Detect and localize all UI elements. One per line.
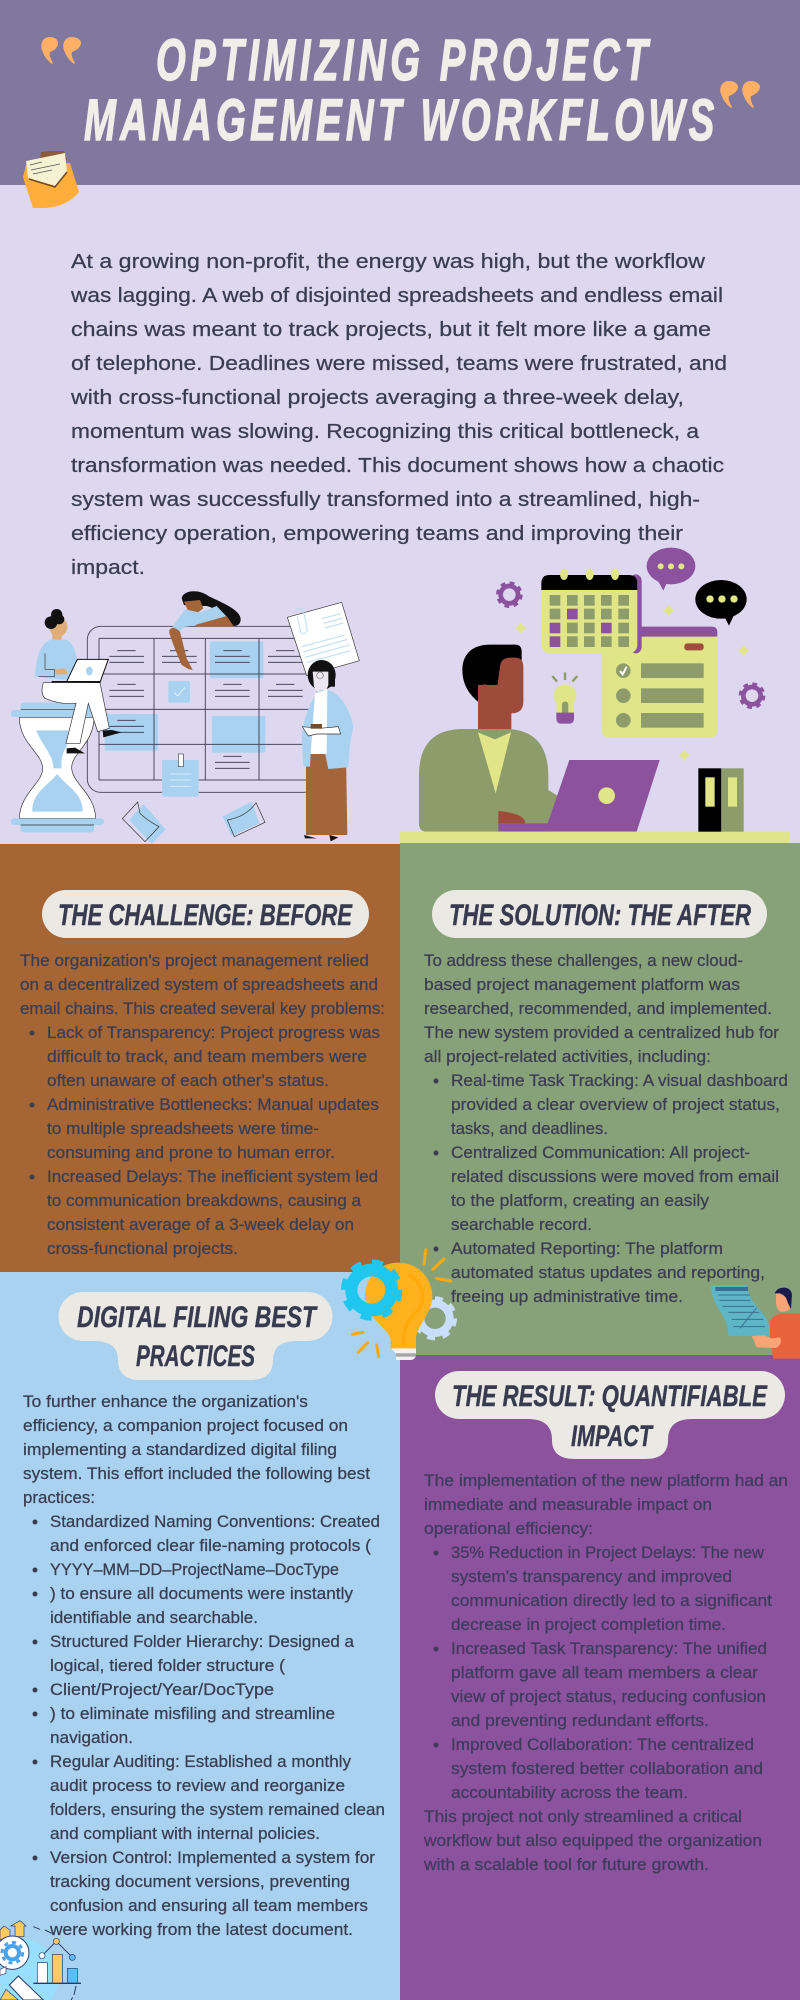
text: result intro, bullets and closing: view of project status, reducing confusion [451, 1687, 766, 1706]
heading: the solution [432, 890, 767, 938]
binders [698, 768, 744, 832]
text: result intro, bullets and closing: immediate and measurable impact on [424, 1495, 712, 1514]
text: challenge intro and bullets: cross-functional projects. [47, 1239, 238, 1258]
text: result intro, bullets and closing: The implementation of the new platform had an [424, 1471, 788, 1490]
text: solution intro and bullets: To address these challenges, a new cloud- [424, 951, 743, 970]
text: challenge intro and bullets: consistent average of a 3-week delay on [47, 1215, 354, 1234]
text: result intro, bullets and closing: Increased Task Transparency: The unified [451, 1639, 767, 1658]
text: filing intro and bullets [23, 1392, 385, 1939]
text: challenge intro and bullets: on a decentralized system of spreadsheets and [20, 975, 378, 994]
header banner [0, 0, 800, 185]
heading: the result [435, 1371, 785, 1459]
text: result intro, bullets and closing: with a scalable tool for future growth. [423, 1855, 709, 1874]
hourglass [11, 703, 104, 832]
text: result intro, bullets and closing: workflow but also equipped the organization [423, 1831, 762, 1850]
text: solution intro and bullets: Automated Reporting: The platform [451, 1239, 723, 1258]
intro text block: chains was meant to track projects, but it felt more like a game [71, 319, 711, 341]
panel: digital filing best practices [0, 1272, 400, 2000]
icon: closing quotation marks [720, 81, 760, 108]
heading: digital filing: DIGITAL FILING BEST [77, 1301, 318, 1334]
title: OPTIMIZING PROJECT [156, 29, 651, 93]
text: solution intro and bullets: researched, recommended, and implemented. [424, 999, 772, 1018]
text: result intro, bullets and closing: operational efficiency: [424, 1519, 593, 1538]
heading: the challenge: THE CHALLENGE: BEFORE [58, 899, 353, 932]
text: filing intro and bullets: system. This effort included the following best [23, 1464, 370, 1483]
text: filing intro and bullets: Structured Folder Hierarchy: Designed a [50, 1632, 355, 1651]
text: filing intro and bullets: implementing a standardized digital filing [23, 1440, 337, 1459]
loose papers on the floor [122, 802, 265, 844]
person with laptop on hourglass [35, 609, 122, 753]
person leaning over the board [169, 591, 241, 670]
icon: light bulb with gears [346, 1250, 454, 1360]
icon: analytics tools [0, 1921, 81, 2000]
heading: digital filing [58, 1292, 332, 1380]
text: challenge intro and bullets: to communication breakdowns, causing a [47, 1191, 362, 1210]
text: filing intro and bullets: identifiable and searchable. [50, 1608, 258, 1627]
text: challenge intro and bullets: to multiple spreadsheets were time- [47, 1119, 319, 1138]
text: challenge intro and bullets: difficult to track, and team members were [47, 1047, 367, 1066]
text: filing intro and bullets: navigation. [50, 1728, 133, 1747]
text: solution intro and bullets: Real-time Task Tracking: A visual dashboard [451, 1071, 788, 1090]
text: result intro, bullets and closing: system fostered better collaboration and [451, 1759, 763, 1778]
text: challenge intro and bullets: Lack of Transparency: Project progress was [47, 1023, 380, 1042]
text: filing intro and bullets: Regular Auditing: Established a monthly [50, 1752, 351, 1771]
speech bubble: purple [647, 548, 695, 591]
text: solution intro and bullets: tasks, and deadlines. [451, 1119, 608, 1138]
text: solution intro and bullets [424, 951, 788, 1306]
text: challenge intro and bullets: Increased Delays: The inefficient system led [47, 1167, 378, 1186]
text: result intro, bullets and closing: communication directly led to a significant [451, 1591, 772, 1610]
text: filing intro and bullets: Version Control: Implemented a system for [50, 1848, 375, 1867]
text: solution intro and bullets: provided a clear overview of project status, [451, 1095, 780, 1114]
text: solution intro and bullets: searchable record. [451, 1215, 592, 1234]
heading: the result: IMPACT [571, 1420, 654, 1453]
text: challenge intro and bullets: consuming and prone to human error. [47, 1143, 335, 1162]
text: filing intro and bullets: efficiency, a companion project focused on [23, 1416, 348, 1435]
text: filing intro and bullets: audit process to review and reorganize [50, 1776, 345, 1795]
intro text block: with cross-functional projects averaging a three-week delay, [70, 387, 684, 409]
text: result intro, bullets and closing: Improved Collaboration: The centralized [451, 1735, 754, 1754]
text: filing intro and bullets: To further enhance the organization's [23, 1392, 308, 1411]
text: challenge intro and bullets: The organization's project management relied [20, 951, 369, 970]
heading: digital filing: PRACTICES [136, 1340, 255, 1373]
title: MANAGEMENT WORKFLOWS [84, 89, 714, 153]
intro text block: impact. [71, 557, 145, 579]
text: filing intro and bullets: ) to eliminate misfiling and streamline [50, 1704, 335, 1723]
icon: light bulb [552, 672, 577, 724]
icon: purple gears [498, 583, 763, 707]
speech bubble: black [695, 580, 747, 626]
text: solution intro and bullets: The new system provided a centralized hub for [424, 1023, 779, 1042]
panel: the solution [400, 843, 800, 1355]
text: solution intro and bullets: related discussions were moved from email [451, 1167, 779, 1186]
text: solution intro and bullets: to the platform, creating an easily [451, 1191, 710, 1210]
illustration: team around a task board [11, 591, 359, 844]
text: filing intro and bullets: folders, ensuring the system remained clean [50, 1800, 385, 1819]
text: filing intro and bullets: confusion and ensuring all team members [50, 1896, 368, 1915]
intro text block: system was successfully transformed into a streamlined, high- [71, 489, 700, 511]
text: filing intro and bullets: YYYY–MM–DD–ProjectName–DocType [50, 1560, 339, 1579]
text: filing intro and bullets: and enforced clear file-naming protocols ( [50, 1536, 371, 1555]
intro text block: momentum was slowing. Recognizing this critical bottleneck, a [71, 421, 700, 443]
text: result intro, bullets and closing: 35% Reduction in Project Delays: The new [451, 1543, 765, 1562]
title [84, 29, 714, 153]
text: solution intro and bullets: all project-related activities, including: [424, 1047, 711, 1066]
text: challenge intro and bullets: Administrative Bottlenecks: Manual updates [47, 1095, 379, 1114]
panel: the result [400, 1355, 800, 2000]
panel: the challenge [0, 844, 400, 1272]
standing person with glasses [302, 660, 353, 841]
text: result intro, bullets and closing: and preventing redundant efforts. [451, 1711, 709, 1730]
intro text block: transformation was needed. This document shows how a chaotic [71, 455, 724, 477]
text: result intro, bullets and closing: platform gave all team members a clear [451, 1663, 758, 1682]
text: filing intro and bullets: practices: [23, 1488, 95, 1507]
icon: sparkles [515, 605, 749, 761]
calendar [541, 569, 642, 653]
text: challenge intro and bullets: often unaware of each other's status. [47, 1071, 329, 1090]
text: result intro, bullets and closing: decrease in project completion time. [451, 1615, 726, 1634]
text: filing intro and bullets: logical, tiered folder structure ( [50, 1656, 285, 1675]
icon: opening quotation marks [41, 37, 81, 64]
illustration: person reading document [711, 1285, 800, 1359]
text: filing intro and bullets: and compliant with internal policies. [50, 1824, 320, 1843]
text: solution intro and bullets: based project management platform was [424, 975, 740, 994]
intro text block: was lagging. A web of disjointed spreadsheets and endless email [70, 285, 723, 307]
intro text block [70, 251, 727, 579]
man with laptop [419, 645, 660, 832]
text: filing intro and bullets: were working from the latest document. [49, 1920, 353, 1939]
heading: the challenge [42, 890, 369, 938]
desk [400, 832, 790, 843]
text: result intro, bullets and closing [423, 1471, 788, 1874]
note with paperclip [287, 602, 359, 676]
checklist panel [602, 627, 717, 737]
icon: envelope with note [23, 151, 79, 208]
intro text block: efficiency operation, empowering teams and improving their [71, 523, 683, 545]
text: result intro, bullets and closing: This project not only streamlined a critical [424, 1807, 742, 1826]
text: filing intro and bullets: tracking document versions, preventing [50, 1872, 350, 1891]
text: solution intro and bullets: Centralized Communication: All project- [451, 1143, 750, 1162]
text: filing intro and bullets: ) to ensure all documents were instantly [50, 1584, 353, 1603]
text: filing intro and bullets: Standardized Naming Conventions: Created [50, 1512, 380, 1531]
text: filing intro and bullets: Client/Project/Year/DocType [50, 1680, 274, 1699]
intro text block: At a growing non-profit, the energy was high, but the workflow [71, 251, 706, 273]
text: solution intro and bullets: freeing up administrative time. [451, 1287, 683, 1306]
text: result intro, bullets and closing: accountability across the team. [451, 1783, 688, 1802]
intro text block: of telephone. Deadlines were missed, teams were frustrated, and [71, 353, 727, 375]
illustration: man at laptop with calendar and checklist [400, 548, 790, 843]
text: solution intro and bullets: automated status updates and reporting, [451, 1263, 765, 1282]
text: challenge intro and bullets: email chains. This created several key problems: [20, 999, 385, 1018]
text: challenge intro and bullets [20, 951, 385, 1258]
text: result intro, bullets and closing: system's transparency and improved [451, 1567, 732, 1586]
